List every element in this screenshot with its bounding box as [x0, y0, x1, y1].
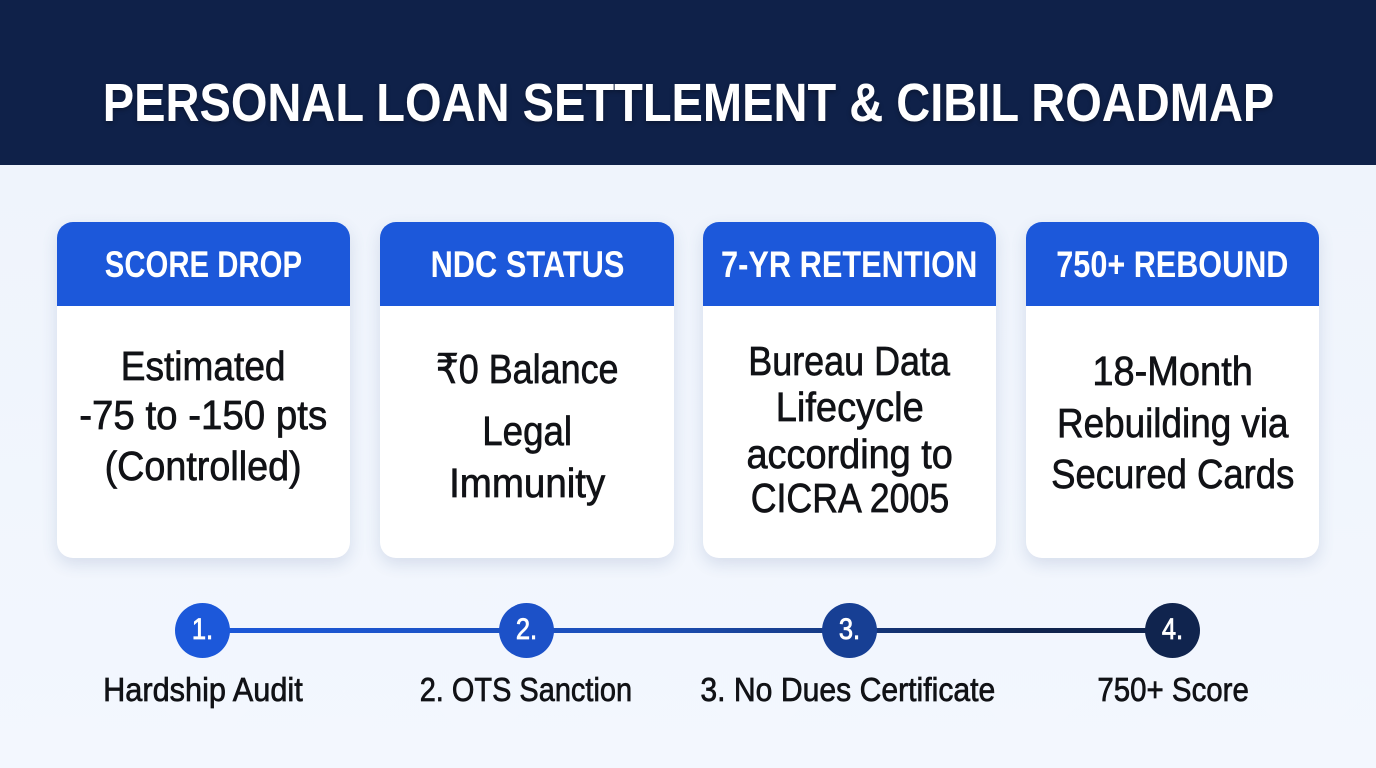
heading: score drop — [57, 222, 350, 306]
step label 1: Hardship Audit — [103, 672, 303, 709]
text: estimated score drop — [79, 343, 327, 489]
text: balance and legal immunity: Immunity — [449, 460, 605, 506]
title: PERSONAL LOAN SETTLEMENT & CIBIL ROADMAP — [103, 73, 1275, 133]
step label 3: 3. No Dues Certificate — [701, 672, 995, 709]
text: balance and legal immunity — [436, 346, 618, 506]
step marker 1: 1. — [192, 613, 213, 646]
panel: 750+ rebound — [1026, 222, 1319, 558]
text: rebuilding plan: Secured Cards — [1051, 451, 1294, 497]
step label 2: 2. OTS Sanction — [420, 672, 632, 709]
heading: 750+ rebound: 750+ REBOUND — [1056, 244, 1289, 285]
text: estimated score drop: -75 to -150 pts — [79, 392, 327, 438]
heading: NDC status: NDC STATUS — [430, 244, 624, 285]
text: rebuilding plan: 18-Month — [1092, 348, 1253, 394]
text: bureau data lifecycle: CICRA 2005 — [750, 475, 949, 521]
heading: NDC status — [380, 222, 674, 306]
text: estimated score drop: Estimated — [121, 343, 286, 389]
heading: 7-year retention — [703, 222, 996, 306]
heading: score drop: SCORE DROP — [105, 244, 302, 285]
text: balance and legal immunity: ₹0 Balance — [436, 346, 618, 392]
step marker 4 — [1145, 603, 1200, 658]
step marker 3 — [822, 603, 877, 658]
step marker 1 — [175, 603, 230, 658]
text: rebuilding plan — [1051, 348, 1294, 497]
timeline connector — [203, 628, 1173, 633]
panel: NDC status — [380, 222, 674, 558]
step marker 4: 4. — [1162, 613, 1183, 646]
text: bureau data lifecycle — [746, 338, 953, 521]
text: bureau data lifecycle: Bureau Data — [749, 338, 950, 384]
heading: 7-year retention: 7-YR RETENTION — [721, 244, 978, 285]
text: estimated score drop: (Controlled) — [105, 443, 302, 489]
text: bureau data lifecycle: according to — [746, 431, 953, 477]
title banner — [0, 0, 1376, 165]
step marker 2: 2. — [516, 613, 537, 646]
text: balance and legal immunity: Legal — [482, 408, 572, 454]
step marker 2 — [499, 603, 554, 658]
step label 4: 750+ Score — [1097, 672, 1249, 709]
step marker 3: 3. — [839, 613, 860, 646]
text: bureau data lifecycle: Lifecycle — [775, 384, 924, 430]
text: rebuilding plan: Rebuilding via — [1057, 400, 1288, 446]
panel: 7-year retention — [703, 222, 996, 558]
panel: score drop — [57, 222, 350, 558]
heading: 750+ rebound — [1026, 222, 1319, 306]
